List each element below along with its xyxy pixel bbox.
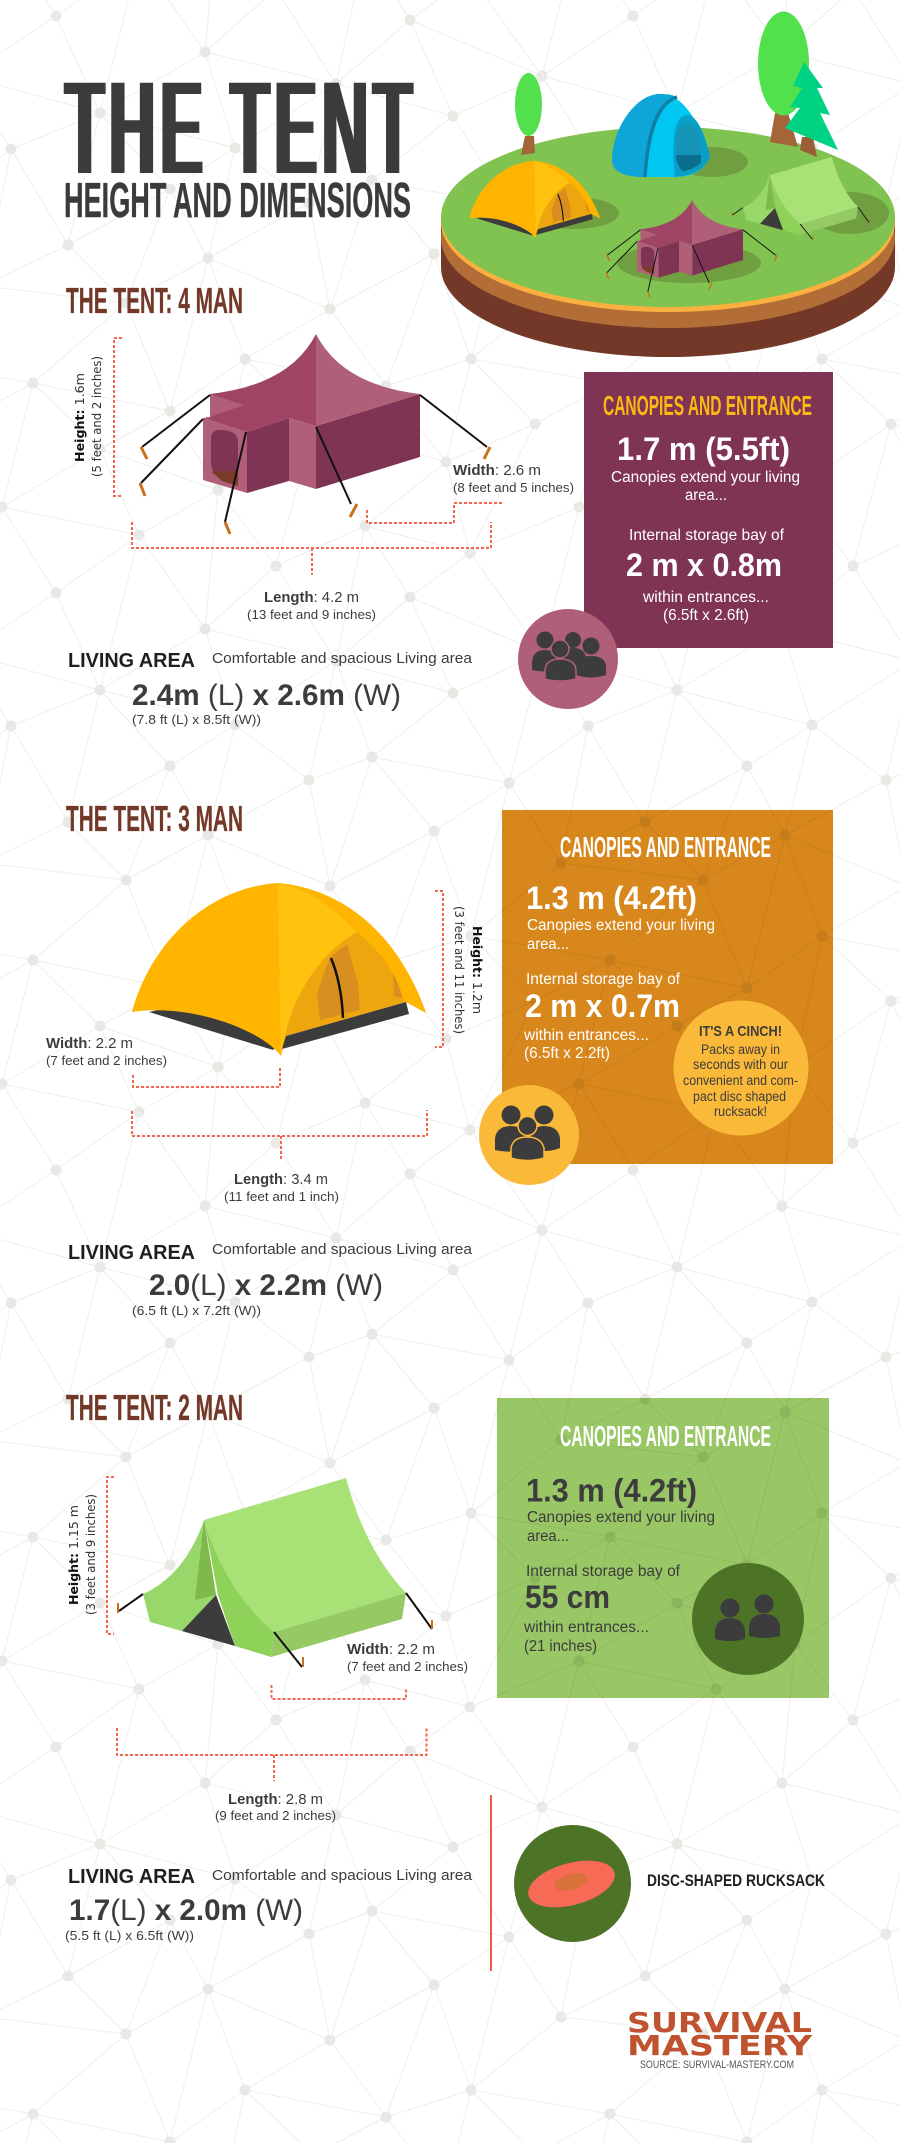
height bracket [114, 338, 122, 496]
length label: (9 feet and 2 inches) [215, 1808, 336, 1823]
pine tree [785, 62, 838, 157]
panel: canopies and entrance: within entrances... [523, 1619, 649, 1636]
icon: two people [692, 1563, 804, 1675]
divider line [490, 1795, 492, 1971]
heading: THE TENT: 4 MAN [66, 280, 243, 321]
height label [73, 356, 104, 477]
logo: survival mastery: SURVIVAL [627, 2006, 812, 2039]
height label: Height: 1.6m [73, 373, 87, 462]
panel: canopies and entrance: area... [527, 1528, 569, 1545]
living area: LIVING AREA [68, 1866, 195, 1888]
panel: canopies and entrance [497, 1398, 829, 1698]
text: THE TENT [65, 52, 417, 205]
width label: (8 feet and 5 inches) [453, 480, 574, 495]
icon: four people [518, 609, 618, 709]
living area: LIVING AREA [68, 1242, 195, 1264]
heading: THE TENT: 3 MAN [66, 798, 243, 839]
living area: 2.4m (L) x 2.6m (W) [132, 679, 401, 712]
living area: 1.7(L) x 2.0m (W) [69, 1894, 303, 1927]
section: 4 man tent [66, 280, 833, 727]
panel: canopies and entrance [584, 372, 833, 648]
panel: canopies and entrance: 1.3 m (4.2ft) [526, 880, 697, 916]
height label: Height: 1.2m [470, 926, 484, 1014]
island ground layers [441, 127, 895, 357]
logo: survival mastery [627, 2006, 813, 2071]
tent illustration [132, 883, 426, 1056]
icon: three people [479, 1085, 579, 1185]
height label: (3 feet and 11 inches) [452, 906, 466, 1034]
panel: canopies and entrance: 1.7 m (5.5ft) [617, 431, 790, 467]
callout: it's a cinch: IT'S A CINCH! [699, 1023, 782, 1040]
panel: canopies and entrance: Canopies extend your living [527, 917, 715, 934]
panel: canopies and entrance [502, 810, 833, 1164]
height bracket [107, 1477, 114, 1634]
subtitle: HEIGHT AND DIMENSIONS [64, 174, 411, 228]
living area: Comfortable and spacious Living area [212, 650, 473, 667]
panel: canopies and entrance: Internal storage bay of [526, 971, 681, 988]
width label: Width: 2.6 m [453, 462, 541, 479]
length label: Length: 4.2 m [264, 589, 359, 606]
panel: canopies and entrance: Canopies extend your living [611, 469, 800, 486]
width label: (7 feet and 2 inches) [347, 1659, 468, 1674]
width bracket [133, 1067, 280, 1087]
height label [67, 1494, 98, 1615]
living area [65, 1866, 473, 1943]
length bracket [132, 522, 491, 575]
panel: canopies and entrance: Canopies extend your living [527, 1509, 715, 1526]
panel: canopies and entrance: Internal storage bay of [526, 1563, 681, 1580]
callout: it's a cinch: rucksack! [714, 1104, 767, 1119]
panel: canopies and entrance: area... [527, 936, 569, 953]
callout: it's a cinch: pact disc shaped [693, 1089, 786, 1104]
illustration: floating island campsite [441, 12, 895, 357]
callout: it's a cinch: Packs away in [701, 1042, 780, 1057]
width label [347, 1641, 468, 1674]
purple tent [606, 200, 777, 298]
tent illustration [118, 1478, 432, 1667]
width bracket [272, 1685, 406, 1699]
living area: (6.5 ft (L) x 7.2ft (W)) [132, 1303, 261, 1318]
length label [215, 1791, 336, 1823]
panel: canopies and entrance: 2 m x 0.7m [525, 988, 680, 1024]
width bracket [367, 503, 502, 523]
living area: (5.5 ft (L) x 6.5ft (W)) [65, 1928, 194, 1943]
icon: disc-shaped rucksack [514, 1825, 631, 1942]
title [64, 52, 417, 228]
width label: (7 feet and 2 inches) [46, 1053, 167, 1068]
height bracket [435, 891, 443, 1047]
panel: canopies and entrance: (6.5ft x 2.6ft) [663, 607, 749, 624]
living area: (7.8 ft (L) x 8.5ft (W)) [132, 712, 261, 727]
length label: (11 feet and 1 inch) [224, 1189, 339, 1204]
green tent [732, 157, 869, 239]
section: 3 man tent [46, 798, 833, 1318]
living area: Comfortable and spacious Living area [212, 1241, 473, 1258]
small tree [515, 73, 542, 155]
callout: it's a cinch: convenient and com- [683, 1073, 798, 1088]
section: 2 man tent [65, 1387, 829, 1971]
panel: canopies and entrance: 2 m x 0.8m [626, 547, 782, 583]
panel: canopies and entrance: area... [685, 487, 727, 504]
panel: canopies and entrance: within entrances... [642, 589, 769, 606]
length bracket [132, 1110, 427, 1161]
living area [68, 650, 473, 727]
panel: canopies and entrance: Internal storage bay of [629, 527, 785, 544]
living area: LIVING AREA [68, 650, 195, 672]
callout: it's a cinch: seconds with our [693, 1057, 788, 1072]
logo: survival mastery: MASTERY [627, 2029, 813, 2062]
length label: (13 feet and 9 inches) [247, 607, 376, 622]
tent illustration [140, 334, 490, 534]
height label: (3 feet and 9 inches) [84, 1494, 98, 1615]
heading: THE TENT: 2 MAN [66, 1387, 243, 1428]
length bracket [117, 1728, 426, 1781]
big tree [758, 12, 809, 147]
callout: it's a cinch [674, 1000, 808, 1136]
width label [453, 462, 574, 495]
panel: canopies and entrance: (6.5ft x 2.2ft) [524, 1045, 610, 1062]
panel: canopies and entrance: (21 inches) [524, 1638, 597, 1655]
panel: canopies and entrance: 1.3 m (4.2ft) [526, 1472, 697, 1508]
panel: canopies and entrance: within entrances... [523, 1027, 649, 1044]
length label [224, 1171, 339, 1204]
source: SOURCE: SURVIVAL-MASTERY.COM [640, 2059, 794, 2071]
width label: Width: 2.2 m [347, 1641, 435, 1658]
panel: canopies and entrance: 55 cm [525, 1579, 610, 1615]
yellow tent [469, 161, 600, 238]
width label [46, 1035, 167, 1068]
label: disc-shaped rucksack: DISC-SHAPED RUCKSACK [647, 1871, 826, 1890]
height label: (5 feet and 2 inches) [90, 356, 104, 477]
living area: Comfortable and spacious Living area [212, 1867, 473, 1884]
living area: 2.0(L) x 2.2m (W) [149, 1269, 383, 1302]
blue tent [612, 94, 710, 177]
length label [247, 589, 376, 622]
height label [452, 906, 484, 1034]
length label: Length: 2.8 m [228, 1791, 323, 1808]
length label: Length: 3.4 m [234, 1171, 328, 1188]
living area [68, 1241, 473, 1318]
height label: Height: 1.15 m [67, 1505, 81, 1605]
width label: Width: 2.2 m [46, 1035, 133, 1052]
